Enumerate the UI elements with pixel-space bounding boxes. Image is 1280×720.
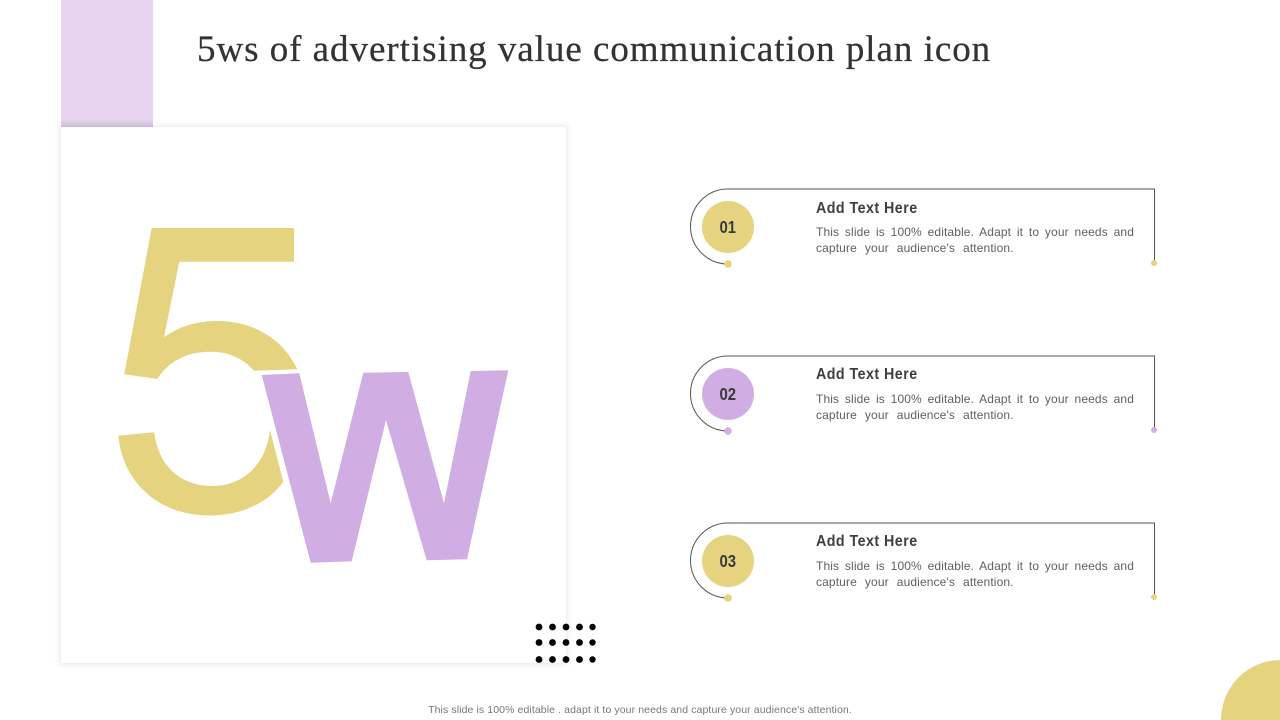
item 02 text <box>816 392 1134 422</box>
item 02 number: 02 <box>720 384 736 404</box>
item 01 text <box>816 225 1134 255</box>
item 01 <box>690 188 1157 268</box>
item 01 heading: Add Text Here <box>816 200 918 217</box>
accent block: lilac <box>61 0 153 127</box>
dot grid decoration <box>536 624 596 663</box>
corner quarter circle <box>1221 660 1280 720</box>
item 01 number <box>702 201 754 253</box>
item 03 text: This slide is 100% editable. Adapt it to your needs and <box>816 559 1134 573</box>
item 03 heading: Add Text Here <box>816 533 918 550</box>
item 03 <box>690 522 1157 602</box>
item 02 text: capture your audience's attention. <box>816 408 1014 422</box>
title: 5ws of advertising value communication plan icon <box>197 29 991 70</box>
panel: 5W card <box>61 127 566 663</box>
item 02 text: This slide is 100% editable. Adapt it to your needs and <box>816 392 1134 406</box>
item 02 <box>690 356 1157 435</box>
item 03 number: 03 <box>720 551 736 571</box>
item 01 text: capture your audience's attention. <box>816 241 1014 255</box>
item 03 number <box>702 535 754 587</box>
item 02 frame <box>690 356 1157 435</box>
footer note: This slide is 100% editable . adapt it to your needs and capture your audience's attention. <box>428 704 852 716</box>
item 02 heading: Add Text Here <box>816 366 918 383</box>
item 03 frame <box>690 522 1157 602</box>
letter W <box>262 370 508 563</box>
item 03 text: capture your audience's attention. <box>816 575 1014 589</box>
item 01 text: This slide is 100% editable. Adapt it to your needs and <box>816 225 1134 239</box>
item 02 number <box>702 368 754 420</box>
item 01 number: 01 <box>720 217 736 237</box>
digit 5 <box>118 228 297 516</box>
item 01 frame <box>690 188 1157 268</box>
item 03 text <box>816 559 1134 589</box>
